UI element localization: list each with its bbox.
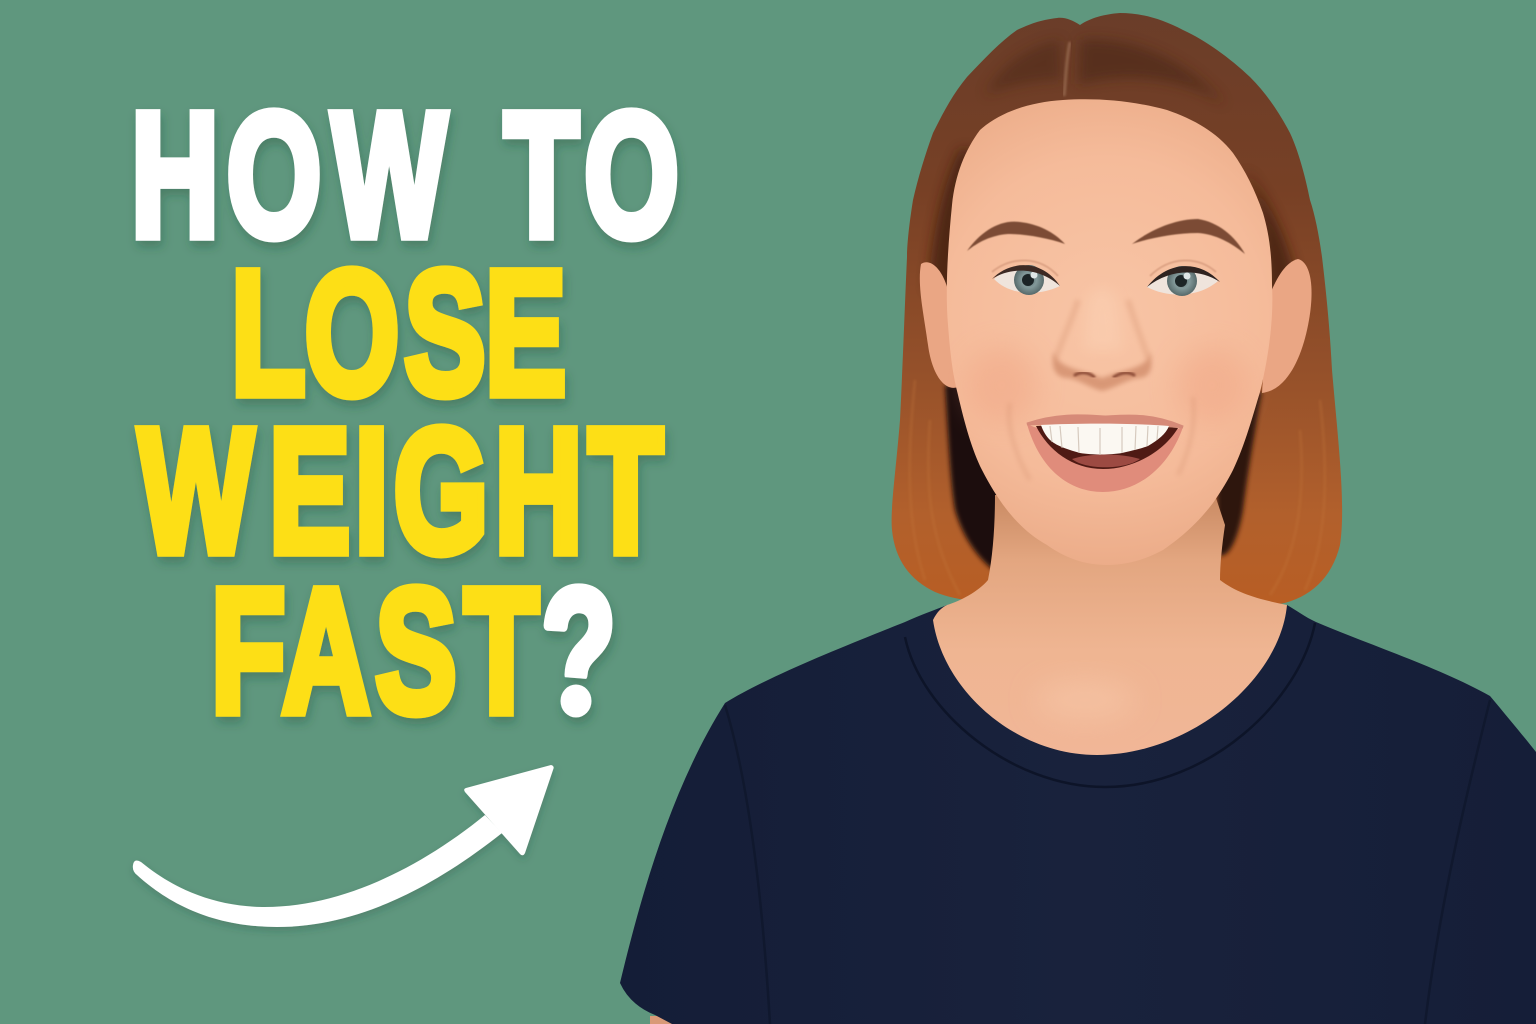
collarbone highlight	[1035, 680, 1135, 720]
tooth gaps	[1050, 426, 1158, 455]
sclera	[1147, 268, 1218, 295]
nose	[1053, 289, 1152, 391]
sleeve seam left	[725, 705, 770, 1024]
iris	[1167, 266, 1197, 296]
lash line	[992, 265, 1060, 286]
teeth	[1041, 424, 1169, 454]
temple shadow left	[928, 150, 975, 300]
hair parting	[1064, 42, 1070, 96]
headline	[131, 77, 679, 750]
crown shadow right	[1078, 39, 1225, 105]
mouth interior	[1036, 425, 1178, 469]
dark hair inside left	[945, 385, 1000, 575]
eyebrow left	[967, 222, 1065, 251]
arrow	[133, 765, 554, 927]
arrow head	[464, 765, 554, 855]
question mark: ?	[542, 553, 616, 750]
eye left	[992, 260, 1060, 295]
lash line	[1147, 266, 1220, 287]
crown shadow left	[985, 40, 1062, 95]
sleeve seam right	[1425, 700, 1490, 1024]
sclera	[994, 268, 1060, 293]
collar seam	[905, 623, 1315, 787]
person	[620, 13, 1536, 1024]
nose side shading	[1056, 300, 1148, 358]
nostrils	[1075, 373, 1134, 377]
shirt body	[620, 605, 1536, 1024]
lower lip	[1027, 424, 1183, 492]
iris	[1014, 265, 1044, 295]
eye crease	[1150, 260, 1216, 276]
arrow shaft	[133, 815, 502, 927]
line: WEIGHT: WEIGHT	[139, 393, 663, 590]
face	[947, 99, 1272, 565]
dark hair inside right	[1215, 392, 1262, 556]
line: FAST: FAST	[211, 553, 539, 750]
ear right	[1262, 259, 1312, 393]
smile lines	[1009, 397, 1194, 480]
cheek blush	[966, 347, 1038, 423]
nose base shadow	[1053, 352, 1152, 391]
eye right	[1147, 260, 1220, 296]
line: HOW TO: HOW TO	[131, 77, 679, 274]
forearm sliver	[650, 1016, 672, 1024]
tongue	[1072, 454, 1140, 467]
hair outer shape	[892, 13, 1342, 604]
temple shadow right	[1245, 170, 1298, 300]
eyebrow right	[1132, 219, 1245, 254]
neck	[933, 495, 1287, 755]
mouth	[1027, 416, 1183, 492]
hair strands	[910, 380, 1325, 595]
ear left	[920, 262, 958, 388]
upper lip	[1027, 416, 1183, 427]
eye crease	[992, 260, 1058, 276]
t-shirt	[620, 605, 1536, 1024]
nose bridge highlight	[1084, 289, 1122, 350]
line: LOSE: LOSE	[231, 235, 566, 432]
hair	[892, 13, 1342, 604]
